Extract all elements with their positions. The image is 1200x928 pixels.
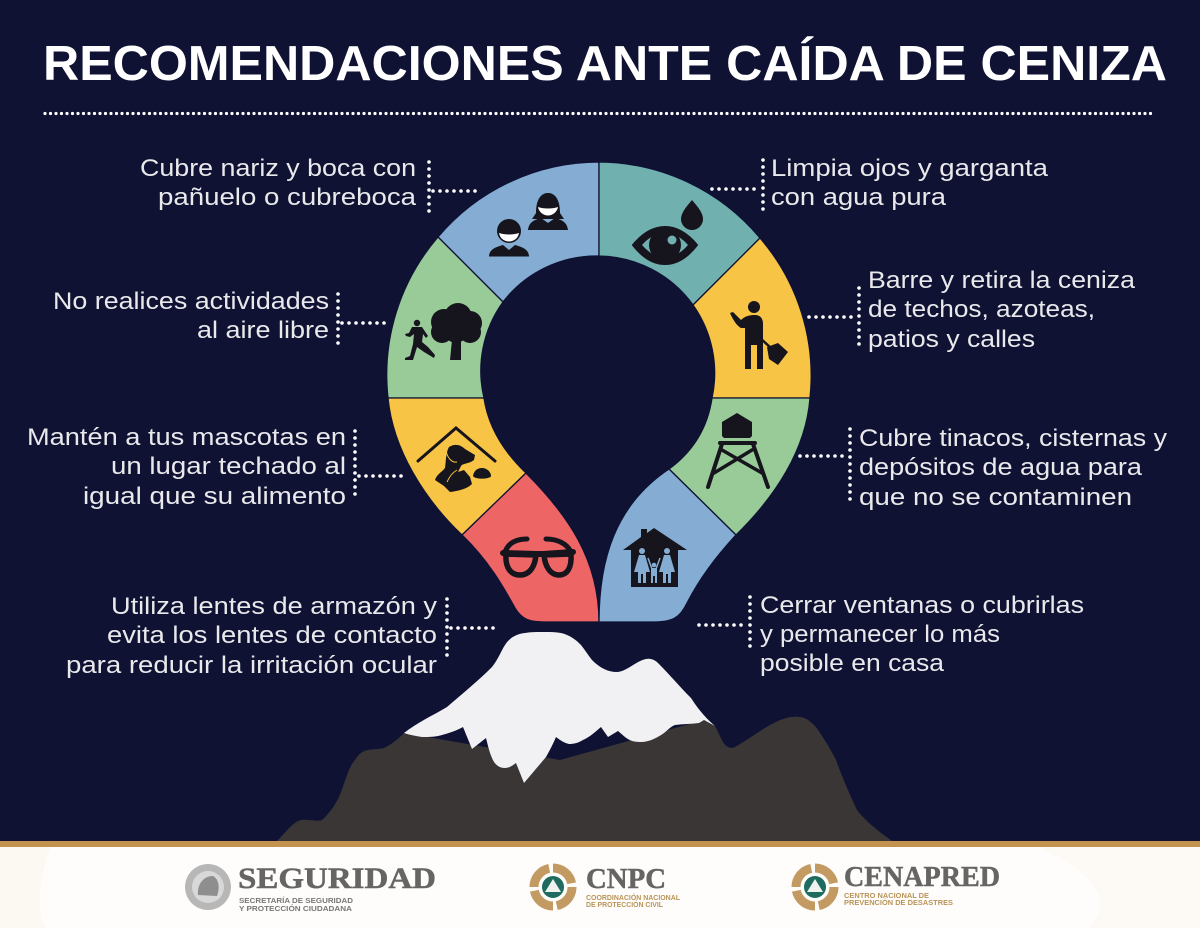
callout: cover water tanks: depósitos de agua para <box>859 454 1143 481</box>
logo: CENAPRED: PREVENCIÓN DE DESASTRES <box>844 898 953 907</box>
icon: CNPC emblem <box>534 868 572 906</box>
snow cap <box>404 632 715 783</box>
callout: outdoor activities: No realices actividades <box>53 288 329 315</box>
segment: blue right <box>599 469 736 622</box>
callout: windows and stay home: posible en casa <box>760 650 945 677</box>
icon: dog and cat under roof with bowl <box>418 428 495 492</box>
callout: eyes and throat: Limpia ojos y garganta <box>771 155 1049 182</box>
logo: Seguridad: Y PROTECCIÓN CIUDADANA <box>239 904 352 913</box>
callout: nose and mouth: Cubre nariz y boca con <box>140 155 416 182</box>
callout: pets: un lugar techado al <box>111 453 346 480</box>
mountain rock <box>277 717 892 841</box>
callout: pets <box>27 424 407 510</box>
icon: people with masks <box>489 193 568 256</box>
icon: national seal <box>185 864 231 910</box>
callout: nose and mouth <box>140 155 481 213</box>
callout: cover water tanks <box>800 425 1167 511</box>
callout: cover water tanks: que no se contaminen <box>859 484 1132 511</box>
logo: CENAPRED: CENTRO NACIONAL DE <box>844 893 929 900</box>
segment: green left <box>387 237 503 398</box>
horseshoe ring <box>387 162 811 622</box>
footer band <box>0 841 1200 928</box>
logo: Seguridad: SECRETARÍA DE SEGURIDAD <box>239 896 353 905</box>
callout: windows and stay home: y permanecer lo más <box>760 621 1000 648</box>
callout: cover water tanks: Cubre tinacos, cisternas y <box>859 425 1167 452</box>
segment: red <box>462 473 599 622</box>
callout: windows and stay home <box>699 592 1084 677</box>
icon: glasses <box>503 539 573 575</box>
callout: eyes and throat: con agua pura <box>771 184 947 211</box>
segment: teal top-right <box>599 162 760 305</box>
callout: glasses: Utiliza lentes de armazón y <box>111 593 437 620</box>
logo: CNPC <box>534 864 681 909</box>
callout: sweep ash: patios y calles <box>868 326 1035 353</box>
segment: blue top-left <box>438 162 599 302</box>
logo: CENAPRED: CENAPRED <box>844 861 1000 893</box>
title: RECOMENDACIONES ANTE CAÍDA DE CENIZA <box>43 37 1167 91</box>
callout: sweep ash: de techos, azoteas, <box>868 296 1095 323</box>
callout: sweep ash <box>809 267 1136 353</box>
logo: Seguridad: SEGURIDAD <box>238 862 436 895</box>
callout: pets: igual que su alimento <box>83 483 346 510</box>
callout: outdoor activities <box>53 288 389 345</box>
logo: Seguridad <box>185 862 436 913</box>
segment: yellow left <box>388 398 526 535</box>
logo: CENAPRED <box>796 861 1000 907</box>
callout: glasses <box>66 593 498 679</box>
callout: sweep ash: Barre y retira la ceniza <box>868 267 1136 294</box>
icon: family in house <box>623 528 687 587</box>
callout: eyes and throat <box>712 155 1049 212</box>
callout: pets: Mantén a tus mascotas en <box>27 424 346 451</box>
volcano <box>277 632 892 841</box>
segment: yellow right <box>693 238 811 398</box>
logo: CNPC: COORDINACIÓN NACIONAL <box>586 893 681 902</box>
callout: outdoor activities: al aire libre <box>197 317 329 344</box>
icon: CENAPRED emblem <box>796 868 834 906</box>
logo: CNPC: CNPC <box>586 864 666 895</box>
callout: glasses: evita los lentes de contacto <box>107 622 437 649</box>
icon: person sweeping ash <box>730 301 788 369</box>
segment: green right <box>669 398 810 535</box>
icon: eye with water drop <box>633 200 703 264</box>
logo: CNPC: DE PROTECCIÓN CIVIL <box>586 900 664 909</box>
callout: glasses: para reducir la irritación ocular <box>66 652 437 679</box>
icon: runner and tree <box>405 303 482 360</box>
callout: nose and mouth: pañuelo o cubreboca <box>158 184 417 211</box>
callout: windows and stay home: Cerrar ventanas o cubrirlas <box>760 592 1084 619</box>
icon: water tower <box>708 413 768 487</box>
